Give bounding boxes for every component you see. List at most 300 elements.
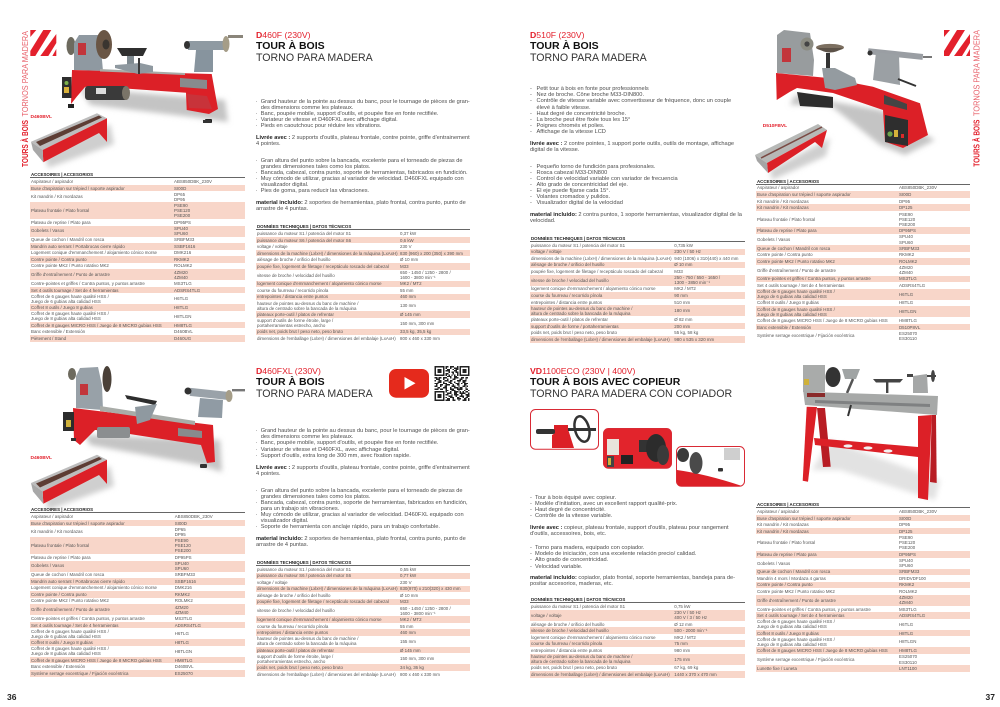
table: technical data D510F: 980 x 535 x 320 mm <box>674 337 714 342</box>
table: accessories D460F: Queue de cochon / Mandril con rosca <box>31 237 104 242</box>
features ES: Gran altura del punto sobre la bancada, excelente para el torneado de piezas de <box>261 158 463 164</box>
table: accessories D510F: Set 4 outils tournage / Set de 4 herramientas <box>757 283 844 288</box>
table: technical data VD1100ECO: 0,75 kW <box>674 604 690 609</box>
table: accessories D460FXL: SSBF1616 <box>175 579 196 584</box>
table: accessories VD1100ECO: Queue de cochon / Mandril con rosca <box>757 569 830 574</box>
table: accessories VD1100ECO: Contre pointe / Contra punto <box>757 582 813 587</box>
table: accessories D510F: Coffret de 8 gauges haute qualité HSS / <box>757 307 835 312</box>
table: accessories D510F: Contre pointe / Contra punto <box>757 252 813 257</box>
table: accessories D460F: DP95PS <box>174 220 191 225</box>
table: technical data D510F: MK2 / MT2 <box>674 286 696 291</box>
included FR <box>256 135 470 147</box>
table: technical data D510F: Ø 82 mm <box>674 317 692 322</box>
table: technical data VD1100ECO: logement conique d'emmanchement / alojamiento cónico morse <box>531 635 656 640</box>
features FR: · <box>256 447 258 453</box>
table: accessories D460FXL: RKMK2 <box>175 592 190 597</box>
table: accessories VD1100ECO: 4ZM40 <box>899 600 913 605</box>
table: accessories D510F: RKMK2 <box>899 252 914 257</box>
detail photo: headstock <box>603 428 672 469</box>
features FR: · <box>256 440 258 446</box>
table: accessories D460F: Plateau de reprise / Plato para <box>31 220 91 225</box>
table: accessories VD1100ECO: ADSRS4TLG <box>899 613 925 618</box>
included FR: 4 pointes. <box>256 471 281 477</box>
features FR <box>256 99 470 129</box>
logo: right stripes <box>944 30 970 56</box>
table: accessories D460F: MS3TLG <box>174 281 192 286</box>
heading: D460FXL: D460FXL (230V) <box>256 366 321 376</box>
features FR: Haut degré de concentricité. <box>535 507 606 513</box>
features FR: Poignes chromés et polies. <box>536 123 604 129</box>
table: technical data D460F: plateaux porte-outil / platos de refrentar <box>257 312 334 317</box>
table: technical data D460F: 150 mm, 300 mm <box>400 321 434 326</box>
table: technical data VD1100ECO <box>530 597 745 678</box>
table: technical data D460FXL: entrepointes / distancia entre puntos <box>257 630 328 635</box>
table: technical data D460F: logement conique d'emmanchement / alojamiento cónico morse <box>257 281 382 286</box>
features ES: · <box>256 524 258 530</box>
table: technical data D460FXL: 155 mm <box>400 639 416 644</box>
table: accessories VD1100ECO: Juego de 8 gubias alta calidad HSS <box>757 642 827 647</box>
included ES <box>530 212 742 224</box>
table: technical data D460FXL: alésage de broche / orificio del husillo <box>257 593 330 598</box>
table: accessories D460FXL: Kit mandrin / Kit mordazas <box>31 529 83 534</box>
table: accessories D510F: SI00D <box>899 192 911 197</box>
included FR: livrée avec : copieur, plateau frontale, support d'outils, plateau pour rangement <box>530 525 729 531</box>
features ES: · <box>256 512 258 518</box>
included ES: material incluido: 2 contra puntos, 1 soporte herramientas, visualizador digital de la <box>530 212 742 218</box>
table: technical data D460F: portaherramientas estrecho, ancho <box>257 323 325 328</box>
table: technical data D460FXL: DONNÉES TECHNIQUES | DATOS TÉCNICOS <box>257 560 351 565</box>
included ES: velocidad. <box>530 218 555 224</box>
table: accessories D510F: H8TLGN <box>899 309 916 314</box>
table: accessories D460FXL: 4ZM20 <box>175 605 188 610</box>
table: technical data D460F: course du fourreau / recorrido pínola <box>257 288 328 293</box>
features FR: élevé à faible vitesse. <box>536 105 591 111</box>
table: technical data D510F: 200 mm <box>674 324 690 329</box>
table: accessories D460F: ADSRS4TLG <box>174 288 200 293</box>
table: accessories D510F: Banc extensible / Extensión <box>757 325 811 330</box>
table: technical data D460F: hauteur de pointes au-dessus du banc de machine / <box>257 301 358 306</box>
table: accessories D460FXL: DMK216 <box>175 585 192 590</box>
table: technical data D460FXL: logement conique d'emmanchement / alojamiento cónico morse <box>257 617 382 622</box>
table: technical data D510F: poids net, poids brut / peso neto, peso bruto <box>531 330 617 335</box>
table: accessories VD1100ECO: ACCESOIRES | ACCESORIOS <box>757 502 819 507</box>
features ES: visualizador digital. <box>261 518 308 524</box>
features ES: Modelo de iniciación, con una excelente relación precio/ calidad. <box>535 551 696 557</box>
table: accessories D510F: Kit mandrin / Kit mordazas <box>757 198 809 204</box>
features ES: Muy cómodo de utilizar, gracias al variador de velocidad. D460FXL equipado con <box>261 512 464 518</box>
table: accessories D510F: Contre-pointes et griffes / Contra puntos, y puntos arrastre <box>757 276 871 281</box>
features FR: Grand hauteur de la pointe au dessus du banc, pour le tournage de pièces de gran- <box>261 428 470 434</box>
table: accessories D460F: Set 4 outils tournage / Set de 4 herramientas <box>31 288 118 293</box>
included FR <box>256 465 470 477</box>
table: technical data D460FXL: M33 <box>400 599 409 604</box>
panel: D460FXL <box>256 366 470 677</box>
side tab: right: TOURS À BOIS <box>972 119 982 167</box>
features FR: · <box>256 453 258 459</box>
features ES: Gran altura del punto sobre la bancada, excelente para el torneado de piezas de <box>261 488 463 494</box>
table: accessories D460FXL <box>30 507 245 677</box>
table: technical data VD1100ECO: 500 - 2000 min⁻¹ <box>674 628 707 633</box>
features ES: · <box>256 158 258 164</box>
table: accessories D510F: PSE90 <box>899 212 913 217</box>
table: accessories VD1100ECO: Contre pointe MK2 / Punto rotativo MK2 <box>757 589 835 594</box>
table: technical data D460FXL: 650 - 1450 / 1250 - 2800 / <box>400 606 451 611</box>
table: accessories D460FXL: HM8TLG <box>175 658 193 663</box>
table: accessories D460FXL: Aspirateur / aspirador <box>31 514 73 519</box>
table: accessories VD1100ECO: Buse d'aspiration sur trépied / soporte aspirador <box>757 516 851 521</box>
table: technical data D460F: 130 mm <box>400 303 416 308</box>
table: accessories VD1100ECO: Juego de 6 gubias alta calidad HSS <box>757 624 827 629</box>
heading: VD1100ECO: TORNO PARA MADERA CON COPIADOR <box>530 388 732 400</box>
table: accessories D460FXL: SPU60 <box>175 566 189 571</box>
table: accessories D460F: H8TLGN <box>174 314 191 319</box>
table: technical data D460F: poupée fixe, logement de filetage / receptáculo roscado del cabezal <box>257 264 389 269</box>
table: accessories D460F: DP65 <box>174 192 185 197</box>
features ES: Rosca cabezal M33-DIN800 <box>536 170 607 176</box>
table: technical data VD1100ECO: dimensions de l'emballage (LxlxH) / dimensiones del embalaje (LxAxH) <box>531 672 670 677</box>
label: D460BVL top: D460BVL <box>30 115 52 120</box>
table: accessories VD1100ECO: DP95 <box>899 522 910 527</box>
table: accessories D510F: Juego de 6 gubias alta calidad HSS <box>757 294 827 299</box>
table: technical data D510F: vitesse de broche / velocidad del husillo <box>531 278 609 283</box>
table: accessories D460F: Gobelets / Vasos <box>31 228 64 233</box>
features FR: · <box>256 117 258 123</box>
table: accessories D460F: Coffret de 8 gauges MICRO HSS / Juego de 8 MICRO gubias HSS <box>31 323 162 328</box>
table: accessories D510F: Contre pointe MK2 / Punto rotativo MK2 <box>757 259 835 264</box>
table: technical data D510F: DONNÉES TECHNIQUES | DATOS TÉCNICOS <box>531 236 625 241</box>
features ES: Bancada, cabezal, contra punto, soporte de herramientas, fabricados en fundición. <box>261 170 468 176</box>
lathe: D510F <box>776 30 935 155</box>
table: accessories VD1100ECO: Coffret de 8 gauges MICRO HSS / Juego de 8 MICRO gubias HSS <box>757 648 888 653</box>
table: accessories VD1100ECO: ES30110 <box>899 660 917 664</box>
included ES: material incluido: 2 soportes de herramientas, plato frontal, contra punto, punto de <box>256 200 466 206</box>
table: technical data D460FXL: 830(970) x 210(320) x 430 mm <box>400 586 460 591</box>
heading: D460F: D460F (230V) <box>256 30 311 40</box>
table: accessories VD1100ECO: LNT1100 <box>899 666 917 671</box>
included ES: arrastre de 4 puntas. <box>256 542 308 548</box>
features FR: Pieds en caoutchouc pour réduire les vibrations. <box>261 123 381 129</box>
table: technical data D460FXL: hauteur de pointes au-dessus du banc de machine / <box>257 636 358 641</box>
label: D460BVL bottom: D460BVL <box>30 456 52 461</box>
included FR: d'outils, accessoires, bois, etc. <box>530 531 606 537</box>
table: accessories D460F: 4ZM20 <box>174 270 188 275</box>
table: accessories D460F: Buse d'aspiration sur trépied / soporte aspirador <box>31 186 125 191</box>
features FR: - <box>530 495 532 501</box>
extension bed: D510FBVL <box>755 124 830 180</box>
features ES: - <box>530 164 532 170</box>
table: technical data VD1100ECO: 175 mm <box>674 657 690 662</box>
features ES: Soporte de herramienta con anclaje rápido, para un trabajo confortable. <box>261 524 440 530</box>
label: D510FBVL: D510FBVL <box>763 124 787 129</box>
table: technical data D460F: entrepointes / distancia entre puntos <box>257 294 328 299</box>
included ES: positar accesorios, maderas, etc. <box>530 581 613 587</box>
table: technical data VD1100ECO: DONNÉES TECHNIQUES | DATOS TÉCNICOS <box>531 597 625 602</box>
table: accessories D510F: Buse d'aspiration sur trépied / soporte aspirador <box>757 192 851 197</box>
panel: VD1100ECO <box>530 366 745 678</box>
features FR: - <box>530 92 532 98</box>
table: accessories VD1100ECO: Set 4 outils tournage / Set de 4 herramientas <box>757 613 844 618</box>
table: accessories VD1100ECO: HM8TLG <box>899 648 917 653</box>
table: technical data D510F: Ø 10 mm <box>674 262 692 267</box>
table: technical data D510F: dimensions de l'emballage (LxlxH) / dimensiones del embalaje (LxAxH) <box>531 337 670 342</box>
table: accessories D460FXL: PSE200 <box>175 548 191 553</box>
features ES: · <box>256 176 258 182</box>
table: technical data D460FXL: 0,77 kW <box>400 573 416 578</box>
features FR: - <box>530 123 532 129</box>
table: accessories D460FXL: 4ZM40 <box>175 610 188 615</box>
table: technical data D510F <box>530 236 745 343</box>
table: accessories VD1100ECO: DP95PS <box>899 552 916 557</box>
table: accessories D510F: MS3TLG <box>899 276 917 281</box>
table: technical data D510F: M33 <box>674 269 683 274</box>
table: technical data D460F: dimensions de l'emballage (LxlxH) / dimensiones del embalaje (LxAxH) <box>257 336 396 341</box>
table: technical data D460F: support d'outils de forme étroite, large / <box>257 318 333 323</box>
table: accessories D460FXL: ACCESOIRES | ACCESORIOS <box>31 507 93 512</box>
table: accessories VD1100ECO: H8TLG <box>899 631 913 636</box>
table: accessories D460F: SRBFM33 <box>174 237 194 242</box>
table: accessories D460F: PSE200 <box>174 213 190 218</box>
table: accessories D510F: PSE120 <box>899 217 915 222</box>
included ES: material incluido: copiador, plato frontal, soporte herramientas, bandeja para de- <box>530 575 735 581</box>
features FR: - <box>530 501 532 507</box>
features ES: para un trabajo sin vibraciones. <box>261 506 339 512</box>
features FR <box>530 495 677 519</box>
included ES <box>256 536 466 548</box>
table: accessories VD1100ECO: Coffret 8 outils / Juego 8 gubias <box>757 631 819 636</box>
detail photo: copier <box>676 446 745 487</box>
table: technical data D460FXL: altura de centrado sobre la bancada de la máquina <box>257 641 356 646</box>
heading: D510F: TORNO PARA MADERA <box>530 52 647 64</box>
features FR: Haut degré de concentricité broche. <box>536 111 626 117</box>
features ES: · <box>256 488 258 494</box>
table: technical data D460FXL: voltage / voltaje <box>257 580 288 585</box>
table: technical data D460F: 55 mm <box>400 288 413 293</box>
table: accessories D460FXL: Contre-pointes et griffes / Contra puntos, y puntos arrastre <box>31 616 145 621</box>
table: accessories D460F: PSE90 <box>174 203 188 208</box>
table: accessories VD1100ECO: ROLMK2 <box>899 589 917 594</box>
table: accessories VD1100ECO: Coffret de 8 gauges haute qualité HSS / <box>757 637 835 642</box>
table: accessories D460FXL: Coffret de 8 gauges MICRO HSS / Juego de 8 MICRO gubias HSS <box>31 658 162 663</box>
features ES <box>530 545 696 570</box>
features ES: Velocidad variable. <box>535 564 582 570</box>
table: technical data D460F: 650 - 1450 / 1250 - 2800 / <box>400 270 451 275</box>
table: accessories D460FXL: Plateau de reprise / Plato para <box>31 555 91 560</box>
features ES: grandes dimensiones tales como los platos. <box>261 164 370 170</box>
table: technical data VD1100ECO: hauteur de pointes au-dessus du banc de machine / <box>531 654 632 659</box>
table: accessories VD1100ECO: ES25070 <box>899 654 917 659</box>
table: technical data D460FXL: 1600 - 3800 min⁻¹ <box>400 611 436 616</box>
features FR: · <box>256 428 258 434</box>
table: technical data D460FXL: puissance du moteur S6 / potencia del motor S6 <box>257 573 351 578</box>
table: technical data D460FXL: 150 mm, 300 mm <box>400 656 434 661</box>
table: technical data D510F: 90 mm <box>674 293 688 298</box>
table: technical data D510F: 180 mm <box>674 308 690 313</box>
features ES: Muy cómodo de utilizar, gracias al variador de velocidad. D460FXL equipado con <box>261 176 464 182</box>
features FR: Banc, poupée mobile, support d'outils, et poupée fixe en fonte rectifiée. <box>261 440 438 446</box>
table: accessories D510F: Coffret de 8 gauges MICRO HSS / Juego de 8 MICRO gubias HSS <box>757 318 888 323</box>
table: accessories D460F: Kit mandrin / Kit mordazas <box>31 194 83 199</box>
features FR <box>530 86 731 135</box>
table: technical data D460F: 33,5 kg, 35,5 kg <box>400 329 431 334</box>
features FR: Modèle d'initiation, avec un excellent rapport qualité-prix. <box>535 501 677 507</box>
table: accessories VD1100ECO: RKMK2 <box>899 582 914 587</box>
table: accessories VD1100ECO: Mandrin 4 mors / Mordaza 4 garras <box>757 576 826 581</box>
extension bed: D460BVL top <box>31 113 114 168</box>
table: technical data D510F: voltage / voltaje <box>531 249 562 254</box>
included FR <box>530 525 729 537</box>
table: accessories D510F: PSE200 <box>899 222 915 227</box>
table: technical data VD1100ECO: MK2 / MT2 <box>674 635 696 640</box>
table: technical data D460F: altura de centrado sobre la bancada de la máquina <box>257 306 356 311</box>
table: accessories D460FXL: PSE90 <box>175 538 188 543</box>
heading: D460FXL: TOUR À BOIS <box>256 376 325 388</box>
table: technical data D460F: 460 mm <box>400 294 416 299</box>
features ES: Torno para madera, equipado con copiador. <box>535 545 644 551</box>
features FR: - <box>530 513 532 519</box>
table: accessories VD1100ECO: Système serrage excentrique / Fijación excéntrica <box>757 657 854 662</box>
table: technical data D510F: 510 mm <box>674 300 690 305</box>
table: technical data D460F: dimensions de la machine (LxlxH) / dimensiones de la máquina (LxAxH) <box>257 251 398 256</box>
table: technical data D460FXL: dimensions de l'emballage (LxlxH) / dimensiones del embalaje (LxAxH) <box>257 672 396 677</box>
table: accessories D460F: DMK216 <box>174 250 191 255</box>
features FR: Affichage de la vitesse LCD <box>536 129 606 135</box>
table: technical data D460F: alésage de broche / orificio del husillo <box>257 257 330 262</box>
features ES: Alto grado de concentricidad del eje. <box>536 182 628 188</box>
table: accessories D510F: SPU40 <box>899 234 913 239</box>
table: accessories D460FXL: Gobelets / Vasos <box>31 563 64 568</box>
table: technical data D510F: 230 V / 50 Hz <box>674 249 701 254</box>
table: technical data D460FXL: portaherramientas estrecho, ancho <box>257 659 325 664</box>
features ES: · <box>256 170 258 176</box>
table: accessories D510F: DP95PS <box>899 228 916 233</box>
table: accessories D460FXL: PSE120 <box>175 543 191 548</box>
table: technical data D460F: M33 <box>400 264 409 269</box>
logo: left stripes <box>30 30 56 56</box>
table: accessories D510F: DP125 <box>899 205 912 210</box>
table: accessories D510F: Queue de cochon / Mandril con rosca <box>757 246 830 251</box>
features ES: - <box>530 557 532 563</box>
features FR: Contrôle de la vitesse variable. <box>535 513 612 519</box>
table: accessories D460FXL: Logement conique d'emmanchement / alojamiento cónico morse <box>31 585 157 590</box>
table: technical data D460F: 0,6 kW <box>400 238 414 243</box>
table: technical data D460F: 830 (960) x 200 (350) x 390 mm <box>400 251 463 256</box>
table: technical data D460F: 800 x 460 x 330 mm <box>400 336 440 341</box>
features ES: - <box>530 182 532 188</box>
lathe: D460FXL <box>63 366 245 472</box>
heading: D460FXL <box>256 366 373 400</box>
table: accessories D460FXL: Contre pointe MK2 / Punto rotativo MK2 <box>31 598 109 603</box>
table: accessories D460F: HM8TLG <box>174 323 192 328</box>
table: accessories D460FXL: Système serrage excentrique / Fijación excéntrica <box>31 671 128 676</box>
features FR: · <box>256 111 258 117</box>
table: technical data D510F: course du fourreau / recorrido pínola <box>531 293 602 298</box>
table: accessories D460FXL: Griffe d'entraînement / Punto de arrastre <box>31 607 110 612</box>
table: accessories D510F: Kit mandrin / Kit mordazas <box>757 205 809 210</box>
table: accessories VD1100ECO: Plateau frontale / Plato frontal <box>757 540 815 545</box>
table: accessories D460F: RKMK2 <box>174 257 189 262</box>
features FR: des dimensions comme les plateaux. <box>261 434 353 440</box>
table: accessories D460FXL: H8TLG <box>175 640 189 645</box>
included ES: material incluido: 2 soportes de herramientas, plato frontal, contra punto, punto de <box>256 536 466 542</box>
table: accessories VD1100ECO: MS3TLG <box>899 607 917 612</box>
features ES: - <box>530 188 532 194</box>
included FR: digital de la vitesse. <box>530 147 579 153</box>
features FR: · <box>256 99 258 105</box>
table: technical data D460FXL: plateaux porte-outil / platos de refrentar <box>257 648 334 653</box>
table: technical data D460F: poids net, poids brut / peso neto, peso bruto <box>257 329 343 334</box>
table: technical data D460FXL: poids net, poids brut / peso neto, peso bruto <box>257 665 343 670</box>
features ES: Pies de goma, para reducir las vibraciones. <box>261 188 369 194</box>
table: technical data D460F: Ø 10 mm <box>400 257 418 262</box>
table: accessories D510F: SPU60 <box>899 240 913 245</box>
table: accessories D510F: Juego de 8 gubias alta calidad HSS <box>757 312 827 317</box>
table: accessories D460F: Mandrin auto serrant / Portabrocas cierre rápido <box>31 244 125 249</box>
table: technical data D460FXL: course du fourreau / recorrido pínola <box>257 624 328 629</box>
features FR: Grand hauteur de la pointe au dessus du banc, pour le tournage de pièces de gran- <box>261 99 470 105</box>
lathe with copier: VD1100ECO <box>803 365 940 500</box>
table: technical data D460F: 0,37 kW <box>400 231 416 236</box>
table: accessories D460F: Aspirateur / aspirador <box>31 179 73 184</box>
table: technical data D460FXL: puissance du moteur S1 / potencia del motor S1 <box>257 567 351 572</box>
panel: D510F <box>530 30 745 343</box>
table: technical data D510F: hauteur de pointes au-dessus du banc de machine / <box>531 306 632 311</box>
QR code <box>434 366 470 401</box>
features FR: - <box>530 507 532 513</box>
table: accessories D460FXL: DP95 <box>175 532 186 537</box>
table: accessories D460FXL: Mandrin auto serrant / Portabrocas cierre rápido <box>31 579 125 584</box>
table: accessories D510F: D510P8VL <box>899 325 920 330</box>
table: technical data D460FXL: 34 kg, 36 kg <box>400 665 424 670</box>
table: accessories D460F: Contre pointe MK2 / Punto rotativo MK2 <box>31 263 109 268</box>
table: accessories D460FXL: ROLMK2 <box>175 598 193 603</box>
table: accessories D460F: H6TLG <box>174 296 188 301</box>
table: accessories D460FXL: ES25070 <box>175 671 193 676</box>
features ES <box>530 164 678 206</box>
table: technical data VD1100ECO: poids net, poids brut / peso neto, peso bruto <box>531 665 617 670</box>
features FR: · <box>256 123 258 129</box>
table: accessories D460FXL: Plateau frontale / Plato frontal <box>31 543 89 548</box>
features FR: - <box>530 129 532 135</box>
table: accessories D460FXL: SRBFM33 <box>175 572 195 577</box>
table: accessories VD1100ECO: Kit mandrin / Kit mordazas <box>757 522 809 527</box>
table: accessories D510F: H6TLG <box>899 292 913 297</box>
features FR: Banc, poupée mobile, support d'outils, et poupée fixe en fonte rectifiée. <box>261 111 438 117</box>
table: accessories VD1100ECO: PSE90 <box>899 535 913 540</box>
heading: D460F <box>256 30 373 64</box>
table: technical data D460FXL: 55 mm <box>400 624 413 629</box>
table: accessories D460F: Contre pointe / Contra punto <box>31 257 87 262</box>
features FR: Variateur de vitesse et D460FXL, avec affichage digital. <box>261 447 399 453</box>
table: technical data D510F: 940 (1006) x 310(440) x 440 mm <box>674 256 738 261</box>
heading: D460FXL: TORNO PARA MADERA <box>256 388 373 400</box>
table: accessories D460F: 4ZM40 <box>174 275 188 280</box>
table: accessories VD1100ECO: H6TLG <box>899 622 913 627</box>
table: technical data VD1100ECO: 75 mm <box>674 641 688 646</box>
table: accessories D460F: SSBF1616 <box>174 244 195 249</box>
features FR: Petit tour à bois en fonte pour professionnels <box>536 86 649 92</box>
side tab: right: TORNOS PARA MADERA <box>972 29 982 116</box>
table: accessories VD1100ECO: Aspirateur / aspirador <box>757 509 799 514</box>
table: accessories VD1100ECO: SRBFM33 <box>899 569 919 574</box>
table: technical data D460F: 1600 - 3800 min⁻¹ <box>400 275 436 280</box>
included ES <box>256 200 466 212</box>
table: accessories D510F: Aspirateur / aspirador <box>757 185 799 190</box>
table: technical data D460FXL: 460 mm <box>400 630 416 635</box>
heading: D460F: TORNO PARA MADERA <box>256 52 373 64</box>
table: technical data VD1100ECO: 230 V / 50 Hz <box>674 610 701 615</box>
table: accessories VD1100ECO: Coffret de 6 gauges haute qualité HSS / <box>757 619 835 624</box>
panel: D460F <box>256 30 470 341</box>
